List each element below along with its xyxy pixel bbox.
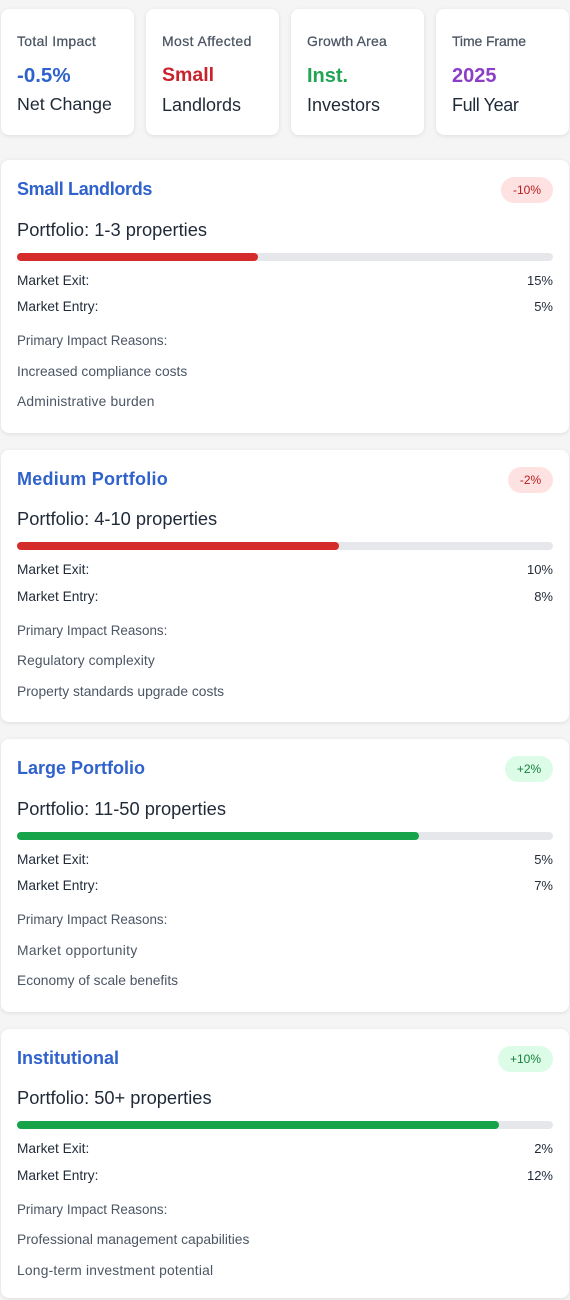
- market exit label: Market Exit:: [17, 562, 89, 577]
- market entry value: 8%: [534, 589, 553, 604]
- market exit label: Market Exit:: [17, 1141, 89, 1156]
- reasons heading: Primary Impact Reasons:: [17, 623, 167, 638]
- market exit value: 15%: [527, 273, 553, 288]
- portfolio size: Portfolio: 50+ properties: [17, 1087, 212, 1108]
- reason 1: Market opportunity: [17, 943, 138, 958]
- badge: -2%: [508, 467, 553, 493]
- stat card: growth area: [291, 9, 424, 135]
- market entry label: Market Entry:: [17, 878, 98, 893]
- heading: medium portfolio: Medium Portfolio: [17, 469, 168, 489]
- portfolio size: Portfolio: 4-10 properties: [17, 508, 217, 529]
- progress bar: [17, 832, 553, 840]
- market exit label: Market Exit:: [17, 273, 89, 288]
- progress bar: [17, 1121, 553, 1129]
- portfolio size: Portfolio: 11-50 properties: [17, 798, 226, 819]
- label: total impact: Total Impact: [17, 33, 96, 49]
- label: most affected: Most Affected: [162, 33, 252, 49]
- market entry value: 12%: [527, 1168, 553, 1183]
- stat card: most affected: [146, 9, 279, 135]
- progress fill: [17, 253, 258, 261]
- reason 2: Administrative burden: [17, 394, 155, 409]
- reasons heading: Primary Impact Reasons:: [17, 333, 167, 348]
- progress bar: [17, 253, 553, 261]
- reason 2: Property standards upgrade costs: [17, 684, 224, 699]
- badge: -10%: -10%: [513, 183, 541, 197]
- badge: +10%: +10%: [510, 1052, 541, 1066]
- label: growth area: Growth Area: [307, 33, 387, 49]
- reasons heading: Primary Impact Reasons:: [17, 912, 167, 927]
- reason 2: Economy of scale benefits: [17, 973, 178, 988]
- heading: small landlords: Small Landlords: [17, 179, 152, 199]
- market entry value: 5%: [534, 299, 553, 314]
- market exit value: 2%: [534, 1141, 553, 1156]
- value: 2025: 2025: [452, 65, 496, 87]
- badge: -2%: -2%: [520, 473, 541, 487]
- badge: +10%: [498, 1046, 553, 1072]
- panel: small landlords: [1, 160, 569, 433]
- value: small: Small: [162, 64, 214, 86]
- market entry label: Market Entry:: [17, 589, 98, 604]
- market entry label: Market Entry:: [17, 1168, 98, 1183]
- market exit label: Market Exit:: [17, 852, 89, 867]
- caption: full year: Full Year: [452, 95, 518, 115]
- reasons heading: Primary Impact Reasons:: [17, 1202, 167, 1217]
- badge: +2%: +2%: [517, 762, 541, 776]
- reason 1: Regulatory complexity: [17, 653, 155, 668]
- panel: institutional: [1, 1029, 569, 1298]
- progress fill: [17, 832, 419, 840]
- value: inst.: Inst.: [307, 65, 348, 87]
- label: time frame: Time Frame: [452, 33, 526, 49]
- market entry label: Market Entry:: [17, 299, 98, 314]
- market exit value: 5%: [534, 852, 553, 867]
- reason 2: Long-term investment potential: [17, 1263, 213, 1278]
- panel: medium portfolio: [1, 450, 569, 722]
- stat card: time frame: [436, 9, 569, 135]
- heading: institutional: Institutional: [17, 1048, 119, 1068]
- value: net change: -0.5%: [17, 64, 71, 87]
- market exit value: 10%: [527, 562, 553, 577]
- badge: +2%: [505, 756, 553, 782]
- progress fill: [17, 542, 339, 550]
- stat card: total impact: [1, 9, 134, 135]
- caption: landlords: Landlords: [162, 95, 241, 115]
- progress fill: [17, 1121, 499, 1129]
- progress bar: [17, 542, 553, 550]
- panel: large portfolio: [1, 739, 569, 1012]
- reason 1: Professional management capabilities: [17, 1232, 249, 1247]
- badge: -10%: [501, 177, 553, 203]
- heading: large portfolio: Large Portfolio: [17, 758, 145, 778]
- market entry value: 7%: [534, 878, 553, 893]
- caption: net change: Net Change: [17, 94, 112, 114]
- caption: investors: Investors: [307, 95, 380, 115]
- portfolio size: Portfolio: 1-3 properties: [17, 219, 207, 240]
- reason 1: Increased compliance costs: [17, 364, 187, 379]
